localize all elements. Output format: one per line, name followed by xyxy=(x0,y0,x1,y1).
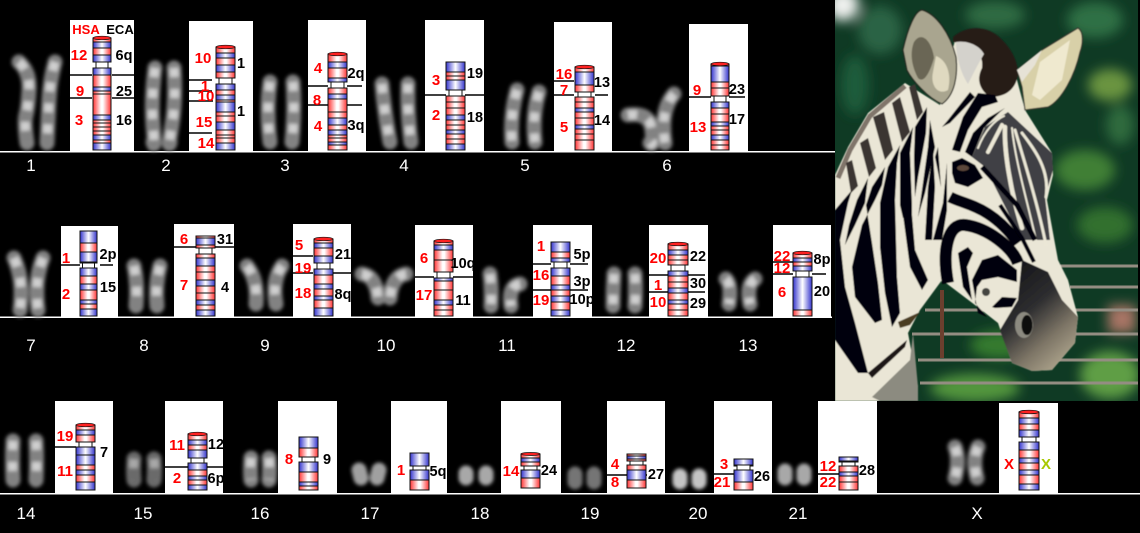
ideogram panel 10: 11 xyxy=(455,293,471,309)
photo background foliage xyxy=(827,0,1140,402)
ideogram panel 1: 25 xyxy=(116,84,132,100)
ideogram panel 7 xyxy=(61,226,118,317)
ideogram panel 7: 2p xyxy=(100,247,117,263)
photo: zebra head xyxy=(827,0,1140,402)
ideogram panel 13: 6 xyxy=(778,284,786,301)
label 12: 12 xyxy=(617,336,635,355)
chromosome pair 18 with ideogram xyxy=(466,401,561,523)
ideogram panel 4: 18 xyxy=(467,110,483,126)
chromosome pair 17 with ideogram xyxy=(359,401,447,523)
ideogram panel X xyxy=(999,403,1058,493)
ideogram panel 2: 10 xyxy=(195,50,211,67)
ideogram panel 2: 1 xyxy=(237,104,245,120)
baseline row 1 xyxy=(0,151,835,152)
neck stripes xyxy=(835,107,947,373)
eye xyxy=(952,158,983,187)
label 17: 17 xyxy=(361,504,379,523)
ideogram panel 20 xyxy=(714,401,772,493)
ideogram panel 3: 4 xyxy=(314,60,323,77)
ideogram panel 12 xyxy=(649,225,708,317)
ideogram panel 12: 30 xyxy=(690,276,706,292)
ideogram panel 21: 12 xyxy=(820,458,836,475)
ideogram panel 16 xyxy=(278,401,337,493)
ideogram panel 1: HSA xyxy=(72,22,100,37)
ideogram panel 21: 28 xyxy=(859,463,875,479)
ideogram panel 11: 16 xyxy=(533,267,549,284)
baseline row 3 xyxy=(0,493,1140,494)
ideogram panel 14: 11 xyxy=(57,463,73,480)
label 20: 20 xyxy=(689,504,707,523)
chromosome pair 12 with ideogram xyxy=(613,225,708,355)
ideogram panel 19: 4 xyxy=(611,456,620,473)
chromosome pair 13 with ideogram xyxy=(726,225,831,355)
ideogram panel 7: 15 xyxy=(100,280,116,296)
karyotype 11 xyxy=(490,274,520,306)
dark fold stripe xyxy=(868,340,907,378)
ideogram panel 16: 8 xyxy=(285,451,293,468)
ideogram panel 9: 21 xyxy=(335,247,351,263)
ideogram panel 18 xyxy=(501,401,561,493)
karyotype 10 xyxy=(362,274,406,298)
ideogram panel 10: 17 xyxy=(416,287,432,304)
label 5: 5 xyxy=(520,156,530,175)
ideogram panel 9 xyxy=(293,224,351,317)
fence xyxy=(912,266,1140,383)
ideogram panel 13: 20 xyxy=(814,284,830,300)
karyotype 9 xyxy=(247,266,282,304)
ideogram panel 5 xyxy=(554,22,612,152)
label 3: 3 xyxy=(280,156,290,175)
chromosome pair X with ideogram xyxy=(955,403,1058,523)
ideogram panel 14: 7 xyxy=(100,445,108,461)
ideogram panel 11: 10p xyxy=(570,292,595,308)
ideogram panel 1: 9 xyxy=(76,83,84,100)
ideogram panel 13: 8p xyxy=(814,252,831,268)
nostril xyxy=(1015,312,1033,338)
karyotype 12 xyxy=(613,274,636,306)
ideogram panel 19: 8 xyxy=(611,474,619,491)
ideogram panel 2: 10 xyxy=(198,88,214,105)
ideogram panel 6: 23 xyxy=(729,82,745,98)
ideogram panel 3 xyxy=(308,20,366,152)
ideogram panel 2: 15 xyxy=(196,114,212,131)
chromosome pair 4 with ideogram xyxy=(382,20,484,175)
ideogram panel 19: 27 xyxy=(648,467,664,483)
karyotype 7 xyxy=(14,258,43,310)
karyotype 15 xyxy=(134,459,154,480)
ideogram panel 18: 24 xyxy=(541,463,557,479)
ideogram panel 12: 10 xyxy=(650,294,666,311)
label 7: 7 xyxy=(26,336,36,355)
ideogram panel 3: 8 xyxy=(313,92,321,109)
chromosome pair 16 with ideogram xyxy=(250,401,337,523)
karyotype 1 xyxy=(19,62,55,143)
ideogram panel 4: 3 xyxy=(432,72,440,89)
ideogram panel 7: 1 xyxy=(62,250,70,267)
ideogram panel 12: 22 xyxy=(690,249,706,265)
ideogram panel 9: 8q xyxy=(335,287,351,303)
label 16: 16 xyxy=(251,504,269,523)
ideogram panel 1: ECA xyxy=(106,22,134,37)
ideogram panel 8: 31 xyxy=(217,232,233,248)
karyotype 20 xyxy=(680,476,699,482)
forehead panel xyxy=(972,112,1053,240)
muzzle xyxy=(1000,260,1078,371)
ideogram panel 2 xyxy=(189,21,253,152)
ideogram panel 6 xyxy=(689,24,748,152)
label 1: 1 xyxy=(26,156,36,175)
chromosome pair 20 with ideogram xyxy=(680,401,772,523)
chromosome pair 10 with ideogram xyxy=(362,225,476,355)
brown fold xyxy=(898,312,920,328)
ideogram panel 20: 3 xyxy=(720,456,728,473)
chromosome pair 2 with ideogram xyxy=(152,21,253,175)
chromosome pair 14 with ideogram xyxy=(12,401,113,523)
label 11: 11 xyxy=(498,336,516,355)
ideogram panel 11: 1 xyxy=(537,238,545,255)
karyotype 19 xyxy=(575,474,594,482)
ideogram panel 17 xyxy=(391,401,447,493)
ideogram panel 5: 13 xyxy=(594,75,610,91)
ideogram panel 3: 2q xyxy=(348,66,364,82)
ideogram panel 10 xyxy=(415,225,476,317)
karyotype 17 xyxy=(359,470,379,478)
ideogram panel 13 xyxy=(773,225,831,317)
ideogram panel 11: 5p xyxy=(574,247,591,263)
chromosome pair 15 with ideogram xyxy=(134,401,225,523)
label 15: 15 xyxy=(134,504,152,523)
ideogram panel 14 xyxy=(55,401,113,493)
karyotype 21 xyxy=(785,471,804,478)
ideogram panel 4: 2 xyxy=(432,107,440,124)
ideogram panel 2: 1 xyxy=(201,78,209,95)
karyotype 3 xyxy=(268,82,294,142)
chromosome pair 7 with ideogram xyxy=(14,226,118,355)
label 10: 10 xyxy=(377,336,395,355)
ideogram panel 1: 12 xyxy=(71,47,87,64)
ideogram panel 17: 5q xyxy=(430,464,446,480)
label 14: 14 xyxy=(17,504,35,523)
ideogram panel 15: 2 xyxy=(173,470,181,487)
ideogram panel 15: 12 xyxy=(208,437,224,453)
ideogram panel 16: 9 xyxy=(323,452,331,468)
ideogram panel 5: 14 xyxy=(594,113,610,129)
ideogram panel 3: 4 xyxy=(314,118,323,135)
ideogram panel 10: 10q xyxy=(450,256,476,272)
ideogram panel 5: 5 xyxy=(560,119,568,136)
karyotype 8 xyxy=(134,266,160,306)
karyotype 16 xyxy=(250,458,270,480)
mane edge xyxy=(838,86,905,178)
ideogram panel 20: 26 xyxy=(754,469,770,485)
ideogram panel 12: 1 xyxy=(654,277,662,294)
ideogram panel 18: 14 xyxy=(503,463,520,480)
ideogram panel 5: 7 xyxy=(560,82,568,99)
label 2: 2 xyxy=(161,156,171,175)
label 4: 4 xyxy=(399,156,409,175)
label 9: 9 xyxy=(260,336,270,355)
karyotype 2 xyxy=(152,68,175,144)
ideogram panel 8: 4 xyxy=(221,280,229,296)
karyotype 18 xyxy=(466,473,486,478)
label X: X xyxy=(971,504,983,523)
forehead white lines xyxy=(978,116,1047,245)
ideogram panel 1: 3 xyxy=(75,112,83,129)
ideogram panel 11: 19 xyxy=(533,292,549,309)
chromosome pair 3 with ideogram xyxy=(268,20,366,175)
chromosome pair 11 with ideogram xyxy=(490,225,595,355)
ideogram panel 6: 17 xyxy=(729,112,745,128)
ideogram panel 8: 7 xyxy=(180,277,188,294)
label 19: 19 xyxy=(581,504,599,523)
left ear xyxy=(903,10,957,104)
ideogram panel 2: 1 xyxy=(237,56,245,72)
karyotype 5 xyxy=(512,90,539,142)
ideogram panel 9: 18 xyxy=(295,285,311,302)
ideogram panel X: X xyxy=(1004,456,1014,473)
karyotype 4 xyxy=(382,84,411,142)
ideogram panel 20: 21 xyxy=(714,474,730,491)
ideogram panel 6: 9 xyxy=(693,82,701,99)
ideogram panel 1: 6q xyxy=(116,48,132,64)
chromosome pair 21 with ideogram xyxy=(785,401,877,523)
ideogram panel 10: 6 xyxy=(420,250,428,267)
chromosome pair 9 with ideogram xyxy=(247,224,351,355)
ideogram panel 13: 22 xyxy=(774,248,790,265)
karyotype X xyxy=(955,447,978,478)
chromosome pair 8 with ideogram xyxy=(134,224,234,355)
ideogram panel 15 xyxy=(165,401,225,493)
ideogram panel 5: 16 xyxy=(556,66,572,83)
karyotype 6 xyxy=(628,94,674,144)
ideogram panel 8: 6 xyxy=(180,231,188,248)
ideogram panel 7: 2 xyxy=(62,286,70,303)
ideogram panel 11 xyxy=(533,225,595,317)
chromosome pair 19 with ideogram xyxy=(575,401,665,523)
ideogram panel 21 xyxy=(818,401,877,493)
ideogram panel 8 xyxy=(174,224,234,317)
mane stripes xyxy=(846,84,923,193)
chromosome pair 6 with ideogram xyxy=(628,24,748,175)
chromosome pair 5 with ideogram xyxy=(512,22,612,175)
ideogram panel 15: 6p xyxy=(208,471,225,487)
forelock xyxy=(953,28,1018,97)
ideogram panel 4 xyxy=(425,20,484,152)
label 6: 6 xyxy=(662,156,672,175)
ideogram panel 1 xyxy=(70,20,134,152)
ideogram panel 17: 1 xyxy=(397,462,405,479)
ideogram panel 3: 3q xyxy=(348,118,364,134)
face stripes above eye xyxy=(942,92,1005,157)
ideogram panel 9: 19 xyxy=(295,260,311,277)
karyotype 14 xyxy=(12,441,36,480)
label 21: 21 xyxy=(789,504,807,523)
baseline row 2 xyxy=(0,316,832,318)
chromosome pair 1 with ideogram xyxy=(19,20,134,175)
right ear xyxy=(1017,28,1082,110)
zebra xyxy=(835,10,1082,401)
ideogram panel 19 xyxy=(607,401,665,493)
ideogram panel X: X xyxy=(1041,456,1051,473)
label 8: 8 xyxy=(139,336,149,355)
label 13: 13 xyxy=(739,336,757,355)
ideogram panel 21: 22 xyxy=(820,474,836,491)
ideogram panel 15: 11 xyxy=(169,437,185,454)
ideogram panel 9: 5 xyxy=(295,237,303,254)
ideogram panel 2: 14 xyxy=(198,135,215,152)
cheek stripes xyxy=(946,167,1035,317)
lower chest shading xyxy=(872,333,918,401)
karyotype 13 xyxy=(726,279,755,304)
ideogram panel 6: 13 xyxy=(690,119,706,136)
ideogram panel 4: 19 xyxy=(467,66,483,82)
neck and head base xyxy=(835,40,1078,401)
ideogram panel 12: 29 xyxy=(690,296,706,312)
ideogram panel 12: 20 xyxy=(650,250,666,267)
ideogram panel 11: 3p xyxy=(574,274,591,290)
ideogram panel 1: 16 xyxy=(116,113,132,129)
ideogram panel 13: 12 xyxy=(774,260,790,277)
ideogram panel 14: 19 xyxy=(57,428,73,445)
label 18: 18 xyxy=(471,504,489,523)
